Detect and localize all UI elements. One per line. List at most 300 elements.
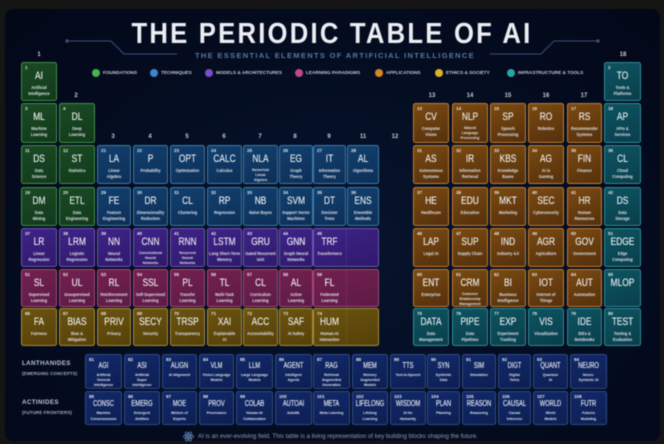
element: NLA: Numerical xyxy=(252,166,269,172)
group number 18: 18 xyxy=(620,52,626,58)
element: OPT: OPT xyxy=(179,153,196,165)
element: MOE: 97 xyxy=(166,394,171,398)
element: VLM xyxy=(199,354,234,389)
element: CL xyxy=(604,145,641,184)
element: ENS: Methods xyxy=(355,216,371,221)
element: AGENT xyxy=(275,354,312,389)
element: NLP xyxy=(452,103,488,143)
element: TEST: 80 xyxy=(608,310,613,316)
element: GOV: GOV xyxy=(575,236,594,248)
element: CL clustering xyxy=(170,187,205,226)
group number 14: 14 xyxy=(467,93,473,99)
element: TTS: 89 xyxy=(394,356,399,362)
element: SIM: Simulation xyxy=(470,372,488,377)
element: RO: Robotics xyxy=(538,126,554,131)
element: RAG: Augmented xyxy=(322,377,341,382)
legend: ethics and society xyxy=(434,68,490,78)
element: AI: 1 xyxy=(25,64,28,70)
legend: learning paradigms: LEARNING PARADIGMS xyxy=(306,70,360,75)
element: RL: RL xyxy=(109,277,119,289)
element: DS storage: Storage xyxy=(615,216,630,221)
element: LSTM: 42 xyxy=(211,230,216,236)
element: SP: 15 xyxy=(494,106,499,110)
element: AUTOAI: 100 xyxy=(279,394,287,398)
panel: lanthanides and actinides xyxy=(84,353,608,426)
element: REASON xyxy=(462,391,496,425)
element: GNN xyxy=(279,228,313,267)
element: NEURO: Symbolic AI xyxy=(579,377,598,382)
element: TRSP: TRSP xyxy=(176,316,199,328)
element: P xyxy=(133,145,168,184)
element: NB: Naive Bayes xyxy=(249,210,272,215)
element: VLM: Models xyxy=(210,377,223,382)
legend: ethics and society: ETHICS & SOCIETY xyxy=(446,70,490,75)
element: RP: RP xyxy=(219,195,230,207)
element: NEURO: NEURO xyxy=(578,361,599,370)
element: IR: IR xyxy=(466,153,474,165)
element: PL: 55 xyxy=(174,272,179,276)
element: IT xyxy=(313,145,346,184)
element: IT: Theory xyxy=(323,174,336,179)
element: DL: Deep xyxy=(72,126,82,131)
element: ETL: Engineering xyxy=(66,216,88,221)
element: ETL: 20 xyxy=(63,190,68,194)
element: IR xyxy=(452,145,488,184)
element: TTS xyxy=(390,354,426,389)
group number 7: 7 xyxy=(258,134,262,140)
element: WISDOM: AI for xyxy=(403,410,413,415)
element: CL curriculum xyxy=(243,269,278,307)
element: SVM xyxy=(279,187,313,226)
element: AP: 18 xyxy=(608,106,613,110)
element: ALIGN: AI Alignment xyxy=(169,372,190,377)
subheading: emerging concepts: (EMERGING CONCEPTS) xyxy=(22,371,77,376)
element: BI xyxy=(490,269,526,307)
element: IT: Information xyxy=(319,168,340,173)
element: VLM: Vision Language xyxy=(203,372,230,377)
element: HUM: Human-AI xyxy=(320,331,339,336)
element: AGI: Intelligence xyxy=(94,382,113,387)
element: OPT: Optimization xyxy=(176,168,199,173)
element: DATA: Data xyxy=(427,331,435,336)
element: FL: Federated xyxy=(320,292,339,297)
element: MKT xyxy=(490,187,526,226)
element: XAI: 71 xyxy=(211,310,216,316)
element: CL: CL xyxy=(617,153,628,165)
element: IDE: Notebooks xyxy=(575,337,594,342)
element: DR xyxy=(133,187,168,226)
element: CAUSAL xyxy=(498,391,531,425)
circuit line right xyxy=(490,38,600,55)
element: FL: FL xyxy=(325,277,334,289)
element: LLM: Large Language xyxy=(241,372,268,377)
element: DIGT: Digital xyxy=(509,372,520,377)
element: EXP xyxy=(490,308,526,346)
element: AGI: Artificial xyxy=(96,372,111,377)
element: TRF: TRF xyxy=(321,236,338,248)
element: IOT: IOT xyxy=(539,277,553,289)
element: SSL xyxy=(133,269,168,307)
element: SVM: Support Vector xyxy=(282,210,310,215)
element: DT: Trees xyxy=(324,216,335,221)
element: LSTM xyxy=(207,228,242,267)
element: LIFELONG xyxy=(352,391,388,425)
legend: techniques xyxy=(149,68,192,78)
element: ENS: 36 xyxy=(351,190,356,194)
element: AG: 34 xyxy=(532,148,537,152)
element: DS: DS xyxy=(33,153,45,165)
element: FIN xyxy=(567,145,602,184)
element: LAP: LAP xyxy=(423,236,439,248)
element: AUT: 64 xyxy=(571,272,576,276)
element: EXP: 77 xyxy=(494,310,499,316)
element: SUP: SUP xyxy=(461,236,479,248)
element: AGENT: AGENT xyxy=(284,361,303,370)
element: AGI: General xyxy=(97,377,110,382)
element: AGI: 81 xyxy=(89,356,94,362)
element: LR: Linear xyxy=(33,251,45,256)
element: ETL xyxy=(59,187,95,226)
element: VIS: 78 xyxy=(532,310,537,316)
subheading: future frontiers: (FUTURE FRONTIERS) xyxy=(22,410,72,415)
element: TEST: Evaluation xyxy=(613,337,632,342)
element: LRM: Regression xyxy=(66,257,88,262)
element: AL: 28 xyxy=(351,148,356,152)
element: GRU: Unit xyxy=(257,257,264,262)
element: KBS: 33 xyxy=(494,148,499,152)
element: NN: Neural xyxy=(108,251,120,256)
element: SAF: SAF xyxy=(288,316,304,328)
element: MEM: Models xyxy=(364,382,376,387)
element: XAI: XAI xyxy=(218,316,231,328)
element: MEM: MEM xyxy=(363,361,377,370)
element: COLAB: Collaboration xyxy=(243,416,266,421)
element: DS storage xyxy=(604,187,641,226)
group number 11: 11 xyxy=(360,134,366,140)
element: CALC: 24 xyxy=(211,148,216,152)
element: SIM: SIM xyxy=(474,361,484,370)
element: EDU: Education xyxy=(461,210,479,215)
subtitle: THE ESSENTIAL ELEMENTS OF ARTIFICIAL INTELLIGENCE xyxy=(195,51,475,60)
element: CV: CV xyxy=(425,111,437,123)
element: SYN: Synthetic xyxy=(436,372,451,377)
element: SL xyxy=(21,269,57,307)
element: SEC xyxy=(528,187,564,226)
element: KBS xyxy=(490,145,526,184)
legend: models and architectures xyxy=(204,68,282,78)
element: HE: 37 xyxy=(417,190,422,194)
element: AGI: AGI xyxy=(99,361,108,370)
element: FL xyxy=(313,269,379,307)
element: CONSC: Consciousness xyxy=(91,416,116,421)
element: PROV: Provenance xyxy=(207,410,226,415)
element: EMERG: EMERG xyxy=(131,399,153,408)
element: DR: Dimensionality xyxy=(137,210,164,215)
element: DM: DM xyxy=(32,195,45,207)
element: VIS: Visualization xyxy=(534,331,558,336)
element: LR xyxy=(21,228,57,267)
element: ST: 12 xyxy=(63,148,68,152)
element: IOT: Internet of xyxy=(537,292,555,297)
element: MOE xyxy=(162,391,197,425)
element: SSL: Learning xyxy=(142,298,159,303)
element: WORLD: 107 xyxy=(537,394,545,398)
element: ASI: ASI xyxy=(137,361,147,370)
element: ASI: Artificial xyxy=(135,372,149,377)
element: PLAN: Planning xyxy=(436,410,451,415)
element: AGENT: 86 xyxy=(279,356,284,362)
element: TEST: TEST xyxy=(612,316,633,328)
element: MLOP: 65 xyxy=(608,272,613,276)
element: PROV: PROV xyxy=(208,399,225,408)
element: PROV: 98 xyxy=(203,394,208,398)
element: TO: Platforms xyxy=(614,91,631,96)
element: CL: 36 xyxy=(608,148,613,152)
element: FL: 59 xyxy=(317,272,322,276)
element: AI: Intelligence xyxy=(28,91,50,96)
element: OPT: 23 xyxy=(174,148,179,152)
element: BIAS: Mitigation xyxy=(68,337,86,342)
element: COLAB: Human-AI xyxy=(246,410,263,415)
title: THE PERIODIC TABLE OF AI xyxy=(131,18,533,50)
element: RNN: RNN xyxy=(178,236,197,248)
element: TO: Tools & xyxy=(616,85,629,90)
element: NLP: Language xyxy=(462,130,478,134)
element: LSTM: Long Short-Term xyxy=(209,251,240,256)
element: NB: 33 xyxy=(247,190,252,194)
element: ML: 3 xyxy=(25,106,28,110)
element: TRF xyxy=(313,228,379,267)
legend: applications xyxy=(374,68,421,78)
element: SVM: SVM xyxy=(287,195,305,207)
element: AGR: AGR xyxy=(537,236,555,248)
element: EXP: Tracking xyxy=(500,337,516,342)
group number 8: 8 xyxy=(293,134,297,140)
element: CONSC: CONSC xyxy=(93,399,114,408)
element: AL active: AL xyxy=(291,277,301,289)
element: LLM: Models xyxy=(248,377,261,382)
element: ENT: Enterprise xyxy=(421,292,441,297)
element: RL: Reinforcement xyxy=(100,292,128,297)
element: RO: RO xyxy=(540,111,552,123)
element: WISDOM: Humanity xyxy=(400,416,416,421)
element: SECY xyxy=(133,308,168,346)
element: RAG xyxy=(313,354,350,389)
element: AG: AI in xyxy=(542,168,550,173)
element: CL clustering: Clustering xyxy=(178,210,197,215)
element: RNN: 41 xyxy=(174,230,179,236)
element: RNN: Networks xyxy=(180,260,195,264)
element: SYN: 90 xyxy=(431,356,436,362)
element: AL: Algorithms xyxy=(353,168,373,173)
element: ALIGN: 83 xyxy=(166,356,171,362)
element: NLP: Processing xyxy=(461,134,479,140)
element: IND: IND xyxy=(501,236,515,248)
element: CRM: Customer xyxy=(462,290,478,296)
element: BI: BI xyxy=(504,277,512,289)
element: SYN: SYN xyxy=(438,361,449,370)
element: QUANT: AI xyxy=(549,377,552,382)
element: WORLD: Models xyxy=(544,416,557,421)
element: CAUSAL: CAUSAL xyxy=(503,399,526,408)
element: META: Meta Learning xyxy=(320,410,343,415)
element: MLOP: MLOP xyxy=(611,277,634,289)
element: DM: 19 xyxy=(25,190,30,194)
element: CNN: CNN xyxy=(141,236,160,248)
element: IR: Information xyxy=(459,168,481,173)
circuit line left xyxy=(64,38,178,55)
element: DL: Learning xyxy=(69,132,85,137)
element: ASI: Super xyxy=(137,377,147,382)
element: LLM: 85 xyxy=(240,356,245,362)
element: TRF: 45 xyxy=(317,230,322,236)
element: TRF: Transformers xyxy=(317,251,342,256)
element: CRM: Relationship xyxy=(459,296,481,300)
element: LR: Regression xyxy=(28,257,50,262)
element: FE xyxy=(97,187,131,226)
element: CL curriculum: CL xyxy=(255,277,266,289)
element: HR: 41 xyxy=(571,190,576,194)
element: IND: 48 xyxy=(494,230,499,236)
element: EDU: 38 xyxy=(456,190,461,194)
element: SAF: AI Safety xyxy=(288,331,304,336)
element: AG xyxy=(528,145,564,184)
element: GRU: 43 xyxy=(247,230,252,236)
element: TL: TL xyxy=(220,277,229,289)
legend: learning paradigms xyxy=(294,68,360,78)
element: MLOP xyxy=(604,269,641,307)
element: LA xyxy=(97,145,131,184)
element: NLA: 25 xyxy=(247,148,252,152)
element: AUT xyxy=(567,269,602,307)
element: EG: EG xyxy=(290,153,302,165)
element: FUTR: Futures xyxy=(582,410,595,415)
element: IOT: Things xyxy=(540,298,552,303)
element: LIFELONG: LIFELONG xyxy=(356,399,384,408)
element: ML: Learning xyxy=(31,132,47,137)
element: META xyxy=(313,391,350,425)
element: ENS xyxy=(347,187,379,226)
element: AGR xyxy=(528,228,564,267)
element: RS: Systems xyxy=(577,132,592,137)
group number 6: 6 xyxy=(222,134,226,140)
element: SEC: Cybersecurity xyxy=(533,210,559,215)
element: AGENT: Agents xyxy=(288,377,299,382)
element: SECY: Security xyxy=(143,331,158,336)
element: RAG: RAG xyxy=(325,361,338,370)
element: RP: 32 xyxy=(211,190,216,194)
element: CRM xyxy=(452,269,488,307)
element: DS: Science xyxy=(32,174,46,179)
element: AUT: Automation xyxy=(574,292,595,297)
element: CNN xyxy=(133,228,168,267)
element: QUANT: 93 xyxy=(537,356,542,362)
element: PL xyxy=(170,269,205,307)
element: ST xyxy=(59,145,95,184)
element: PRIV: PRIV xyxy=(104,316,124,328)
element: NN xyxy=(97,228,131,267)
element: SUP: Supply Chain xyxy=(458,251,482,256)
group number 12: 12 xyxy=(392,134,398,140)
element: AUT: AUT xyxy=(576,277,593,289)
legend: infrastructure and tools xyxy=(506,68,584,78)
element: CL curriculum: Curriculum xyxy=(250,292,271,297)
element: FUTR: Modeling xyxy=(581,416,596,421)
group number 9: 9 xyxy=(327,134,331,140)
element: NEURO: Neuro- xyxy=(583,372,594,377)
element: CONSC: Machine xyxy=(96,410,111,415)
element: SYN xyxy=(427,354,460,389)
element: NLA: NLA xyxy=(252,153,269,165)
element: MEM: Memory xyxy=(363,372,377,377)
element: SUP: 47 xyxy=(456,230,461,236)
group number 3: 3 xyxy=(111,134,115,140)
element: MKT: MKT xyxy=(499,195,517,207)
element: VIS xyxy=(528,308,564,346)
element: LA: 21 xyxy=(101,148,106,152)
element: SIM xyxy=(462,354,496,389)
element: SVM: Machines xyxy=(287,216,305,221)
element: IDE xyxy=(567,308,602,346)
element: NN: 39 xyxy=(101,230,106,236)
element: TEST: Testing & xyxy=(614,331,631,336)
element: DS: 11 xyxy=(25,148,30,152)
element: TO: TO xyxy=(617,70,628,82)
element: RS: Recommender xyxy=(571,126,598,131)
element: SECY: SECY xyxy=(139,316,162,328)
element: DR: DR xyxy=(144,195,157,207)
element: ML xyxy=(21,103,57,143)
element: EDGE: Computing xyxy=(612,257,633,262)
element: QUANT: QUANT xyxy=(540,361,561,370)
element: GNN: Graph Neural xyxy=(284,251,308,256)
element: CNN: Networks xyxy=(143,260,158,264)
element: FE: 29 xyxy=(101,190,106,194)
heading: actinides: ACTINIDES xyxy=(22,399,59,406)
legend: models and architectures: MODELS & ARCHITECTURES xyxy=(216,70,282,75)
element: MEM xyxy=(352,354,388,389)
element: EG: Graph xyxy=(290,168,302,173)
element: CRM: Management xyxy=(459,300,481,306)
element: HR: Resources xyxy=(575,216,594,221)
element: AUTOAI xyxy=(275,391,312,425)
element: DIGT xyxy=(498,354,531,389)
element: CL curriculum: Learning xyxy=(252,298,269,303)
element: PRIV xyxy=(97,308,131,346)
element: RAG: Retrieval xyxy=(324,372,339,377)
element: FA: 66 xyxy=(25,310,30,316)
element: EG: Theory xyxy=(290,174,302,179)
element: RS: 17 xyxy=(571,106,576,110)
element: LR: LR xyxy=(34,236,44,248)
element: TEST xyxy=(604,308,641,346)
element: ASI xyxy=(124,354,160,389)
element: CAUSAL: Inference xyxy=(507,416,522,421)
element: META: 101 xyxy=(317,394,325,398)
element: CL clustering: CL xyxy=(182,195,193,207)
element: CL: Cloud xyxy=(617,168,628,173)
element: RAG: 87 xyxy=(317,356,322,362)
element: LAP: 46 xyxy=(417,230,422,236)
element: NLP: Natural xyxy=(464,124,476,130)
element: RL: Learning xyxy=(106,298,122,303)
element: WORLD: WORLD xyxy=(540,399,561,408)
element: CL curriculum: 57 xyxy=(247,272,252,276)
element: DT: Decision xyxy=(321,210,338,215)
element: RL: 53 xyxy=(101,272,106,276)
element: EDGE: 51 xyxy=(608,230,613,236)
element: AS: Autonomous xyxy=(419,168,443,173)
